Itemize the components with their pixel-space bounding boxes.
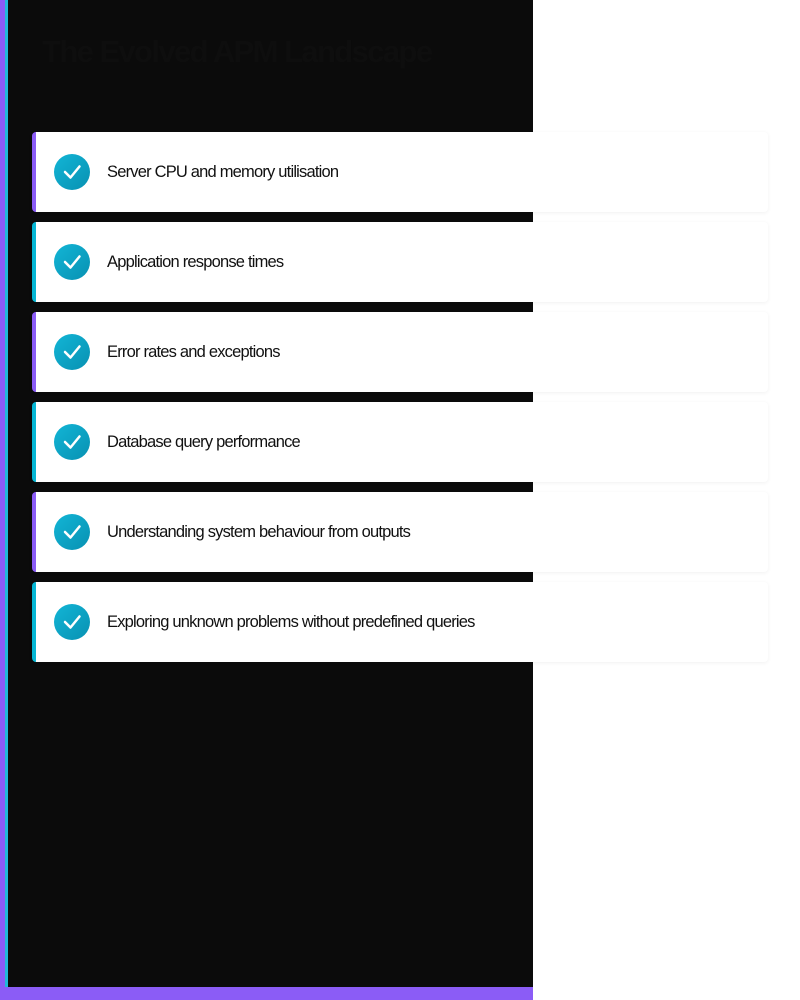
accent strip [0,0,8,987]
card 2: Application response times [107,253,283,271]
card 4: Database query performance [107,433,300,451]
card 1: Server CPU and memory utilisation [107,163,338,181]
card 3: Error rates and exceptions [107,343,280,361]
card 5 [32,492,768,572]
bottom bar [0,987,533,1000]
card 4 [32,402,768,482]
card 1 [32,132,768,212]
card 2 [32,222,768,302]
card 5: Understanding system behaviour from outputs [107,523,410,541]
card 6 [32,582,768,662]
dark panel [0,0,533,1000]
title: The Evolved APM Landscape [42,34,432,69]
card 6: Exploring unknown problems without predefined queries [107,613,475,631]
card 3 [32,312,768,392]
